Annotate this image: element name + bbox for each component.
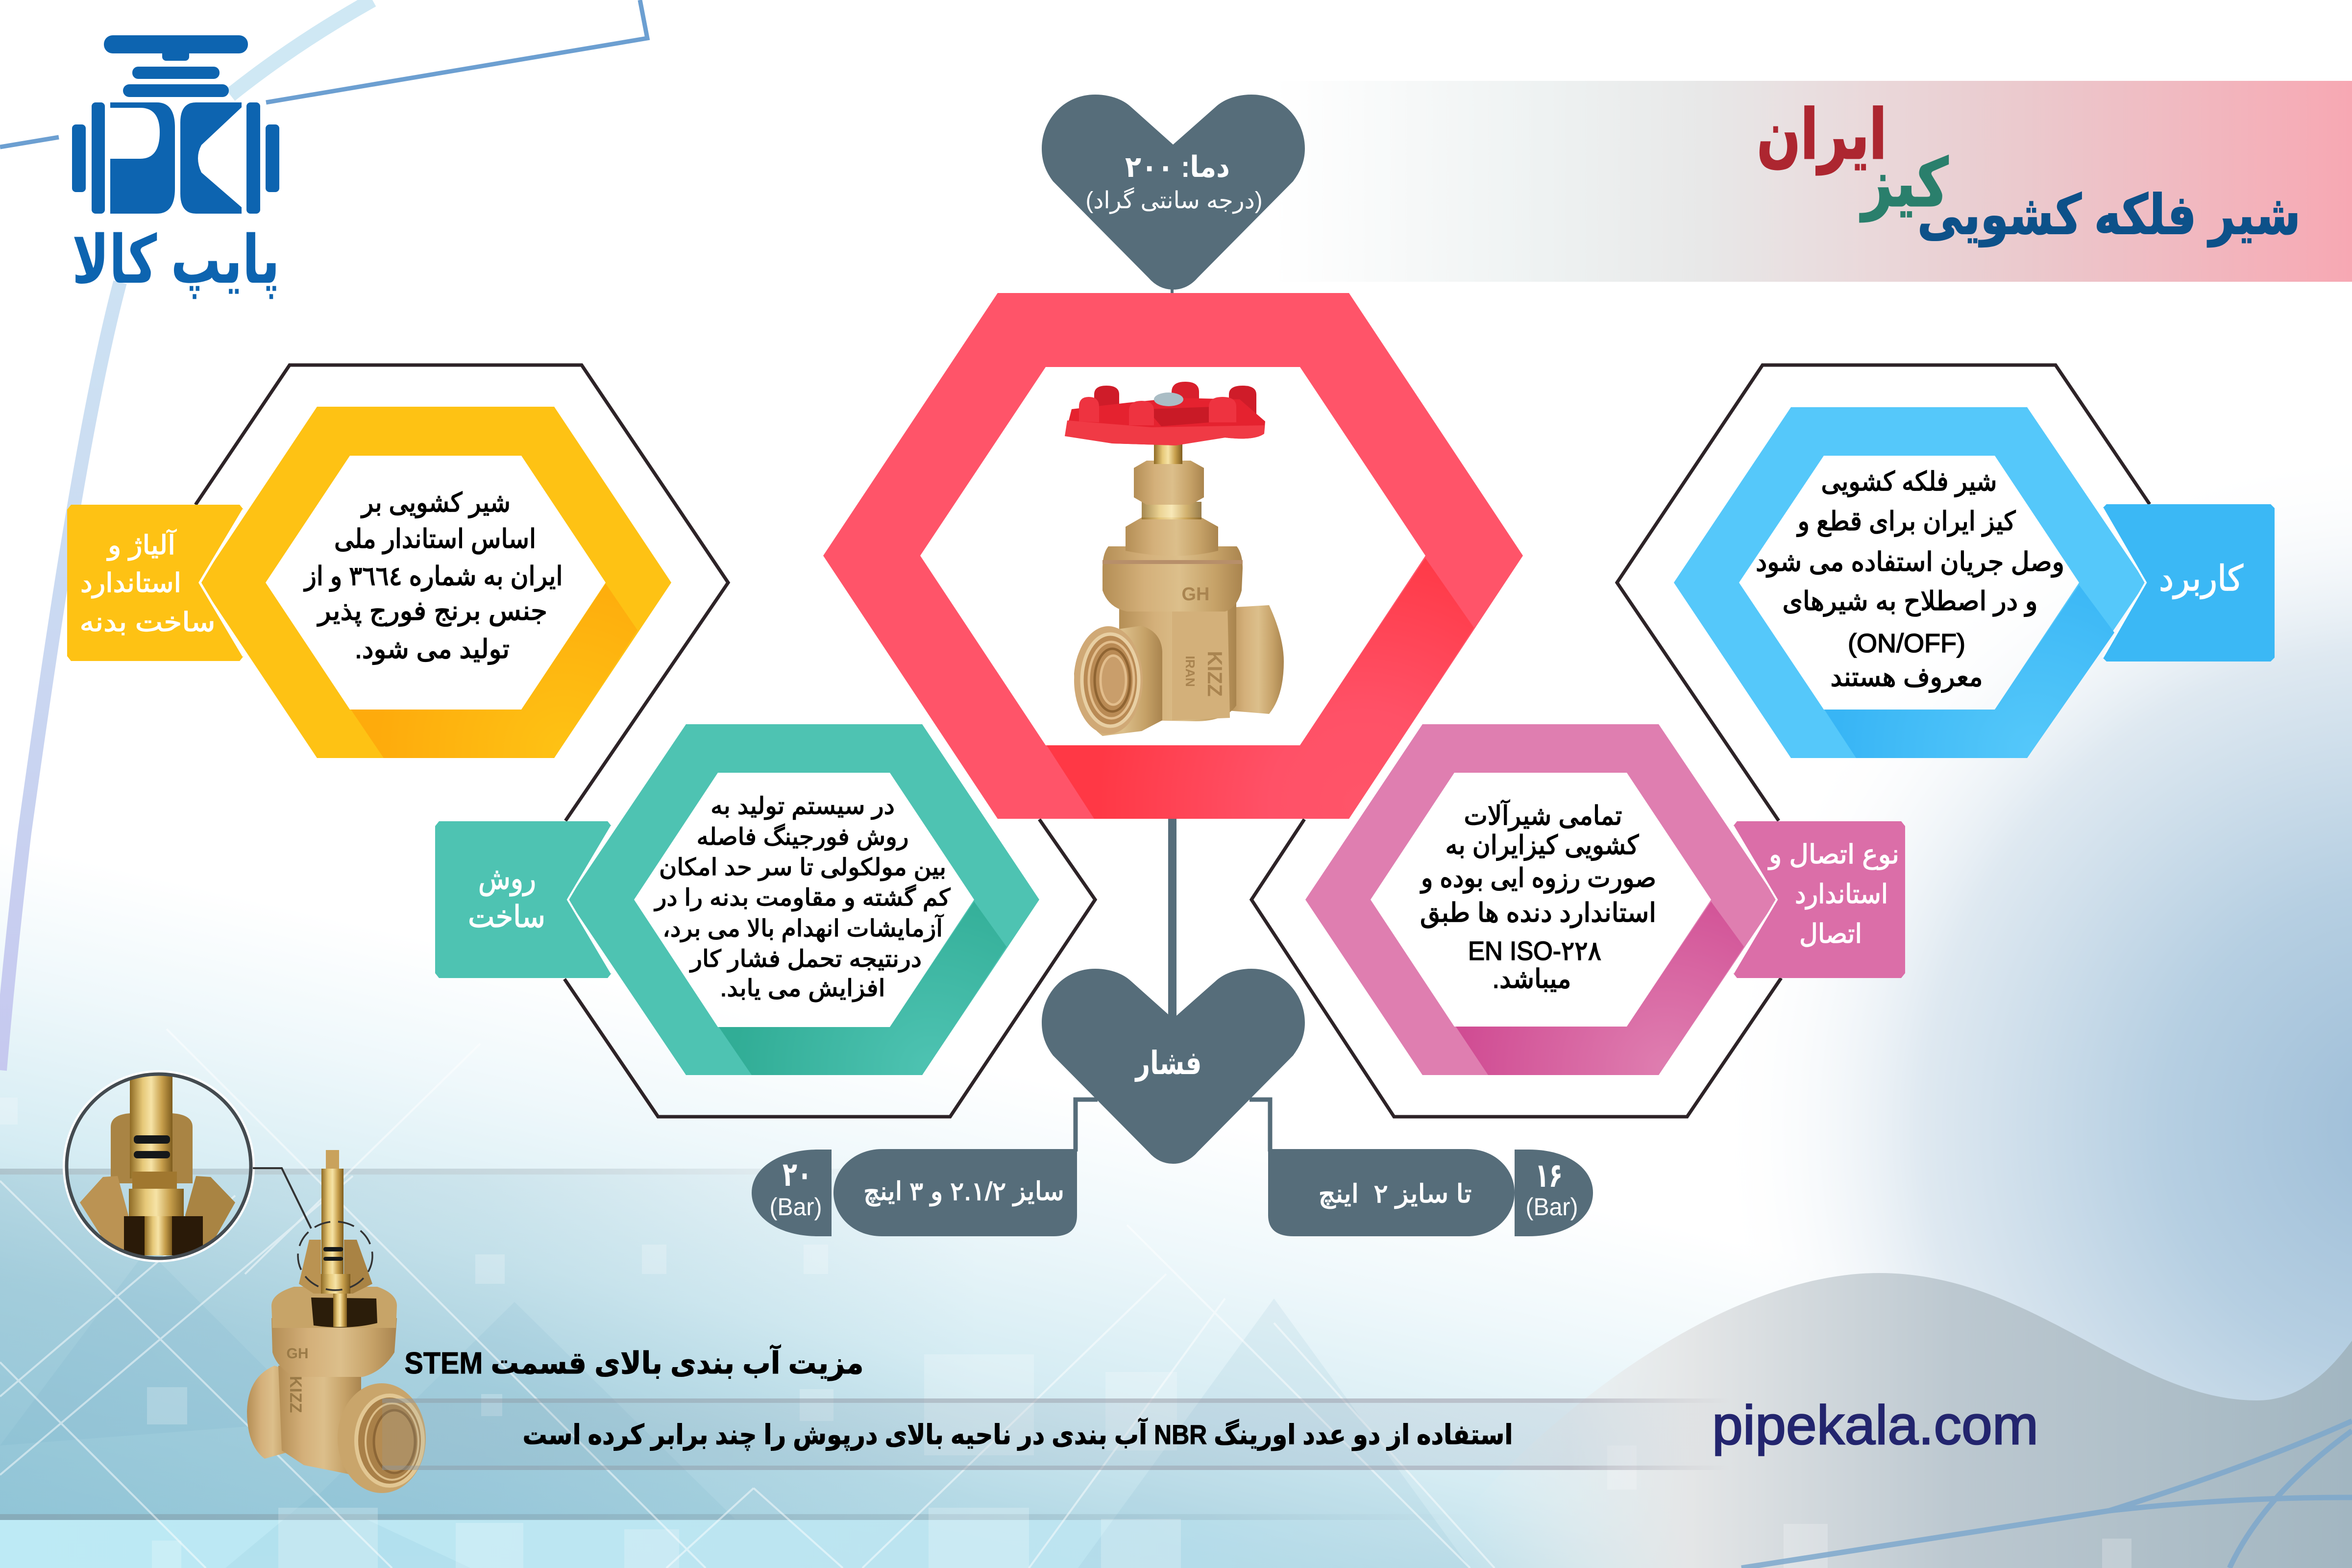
icon: cutaway gate valve: KIZZ	[286, 1376, 305, 1413]
icon: magnifier of stem seal	[64, 1072, 253, 1261]
yellow tag: استاندارد	[80, 568, 181, 598]
pink tag	[1733, 821, 1905, 978]
blue hexagon text: شیر فلکه کشویی	[1821, 467, 1997, 497]
teal tag: روش	[478, 862, 536, 896]
yellow hexagon text: ایران به شماره ۳٦٦٤ و از	[303, 562, 563, 591]
blue hexagon text: و در اصطلاح به شیرهای	[1783, 587, 2037, 616]
pink hexagon text: تمامی شیرآلات	[1464, 800, 1622, 831]
title: کیز	[1860, 146, 1948, 222]
pill: 20 bar: ۲۰	[783, 1156, 812, 1193]
pill: 20 bar: (Bar)	[769, 1193, 822, 1221]
teal hexagon text	[654, 793, 951, 1002]
panel: yellow hexagon alloy	[67, 407, 671, 758]
connector line between hexagon and pressure heart	[1168, 288, 1176, 1023]
website url: pipekala.com	[1712, 1395, 2038, 1456]
pink hexagon text	[1420, 800, 1656, 994]
yellow hexagon text: شیر کشویی بر	[360, 488, 511, 518]
pill: 16 bar: (Bar)	[1526, 1193, 1578, 1221]
yellow hexagon text: تولید می شود.	[355, 635, 510, 664]
pink tag: نوع اتصال و	[1767, 840, 1899, 870]
header band	[1274, 81, 2352, 282]
yellow tag	[67, 505, 244, 661]
blue hexagon text: کیز ایران برای قطع و	[1796, 507, 2016, 537]
logo	[72, 35, 280, 299]
yellow hexagon text	[303, 488, 563, 664]
icon: gate valve photo: KIZZ	[1203, 651, 1226, 697]
teal hexagon text: کم گشته و مقاومت بدنه را در	[654, 884, 951, 911]
yellow hexagon text: اساس استاندار ملی	[334, 524, 536, 554]
description strip	[382, 1398, 1730, 1470]
icon: cutaway gate valve: GH	[286, 1346, 309, 1362]
decorative arc and blue line	[0, 0, 647, 1070]
icon: gate valve photo: IRAN	[1183, 656, 1198, 687]
bottom heart: pressure: فشار	[1134, 1045, 1201, 1082]
pink hexagon text: کشویی کیزایران به	[1446, 831, 1639, 860]
pill: up to 2 inch size: تا سایز ۲ اینچ	[1318, 1180, 1472, 1209]
top heart: temperature	[1042, 95, 1305, 290]
pressure brackets	[1076, 1100, 1270, 1152]
title: ایران	[1757, 96, 1886, 175]
bottom heart: pressure	[1042, 965, 1305, 1164]
pink hexagon text: صورت رزوه ایی بوده و	[1420, 863, 1656, 893]
blue hexagon text: معروف هستند	[1831, 662, 1983, 692]
teal hexagon text: بین مولکولی تا سر حد امکان	[659, 855, 946, 881]
title	[1757, 96, 2301, 247]
logo wordmark: پایپ کالا	[72, 222, 280, 299]
pill: 16 bar	[1515, 1150, 1593, 1236]
icon: cutaway gate valve	[247, 1150, 426, 1493]
pink hexagon text: EN ISO-۲۲۸	[1468, 936, 1601, 966]
outline hexagons	[196, 365, 2150, 1117]
panel: pink hexagon connection	[1305, 724, 1905, 1075]
panel: center product hexagon	[823, 293, 1523, 819]
teal hexagon text: در سیستم تولید به	[710, 793, 895, 820]
pill: 2.5 and 3 inch size: سایز ۲.۱/۲ و ۳ اینچ	[863, 1177, 1064, 1206]
top heart: temperature: دما: ۲۰۰	[1125, 150, 1230, 183]
icon: gate valve photo	[1065, 382, 1284, 736]
blue hexagon text: وصل جریان استفاده می شود	[1756, 547, 2064, 577]
pill: 16 bar: ۱۶	[1535, 1157, 1563, 1194]
stem advantage heading: مزیت آب بندی بالای قسمت STEM	[405, 1344, 863, 1381]
pink hexagon text: میباشد.	[1493, 964, 1571, 994]
panel: teal hexagon method	[435, 724, 1039, 1075]
description strip: استفاده از دو عدد اورینگ NBR آب بندی در ناحیه بالای درپوش را چند برابر کرده است	[522, 1418, 1513, 1451]
logo: valve symbol	[72, 35, 279, 214]
pill: 2.5 and 3 inch size	[833, 1149, 1077, 1236]
pill: 20 bar	[752, 1150, 832, 1236]
pink tag: اتصال	[1799, 919, 1862, 949]
blue hexagon text: (ON/OFF)	[1848, 629, 1965, 658]
valve handwheel	[1065, 382, 1265, 445]
blue hexagon text	[1756, 467, 2064, 692]
top heart: temperature: (درجه سانتی گراد)	[1086, 187, 1262, 214]
teal tag: ساخت	[468, 900, 545, 934]
yellow tag: آلیاژ و	[106, 529, 176, 561]
panel: blue hexagon application	[1674, 407, 2275, 758]
blue tag	[2103, 504, 2275, 662]
leader line	[253, 1168, 311, 1228]
teal hexagon text: درنتیجه تحمل فشار کار	[689, 946, 922, 973]
teal hexagon text: آزمایشات انهدام بالا می برد،	[662, 914, 944, 942]
blue tag: کاربرد	[2159, 559, 2244, 599]
teal tag	[435, 821, 612, 978]
pill: up to 2 inch size	[1268, 1149, 1515, 1236]
pink hexagon text: استاندارد دنده ها طبق	[1420, 898, 1656, 929]
yellow hexagon text: جنس برنج فورج پذیر	[317, 596, 547, 627]
teal hexagon text: روش فورجینگ فاصله	[697, 823, 908, 851]
teal hexagon text: افزایش می یابد.	[720, 976, 885, 1002]
yellow tag: ساخت بدنه	[79, 608, 216, 637]
icon: gate valve photo: GH	[1182, 584, 1209, 605]
pink tag: استاندارد	[1795, 880, 1888, 909]
